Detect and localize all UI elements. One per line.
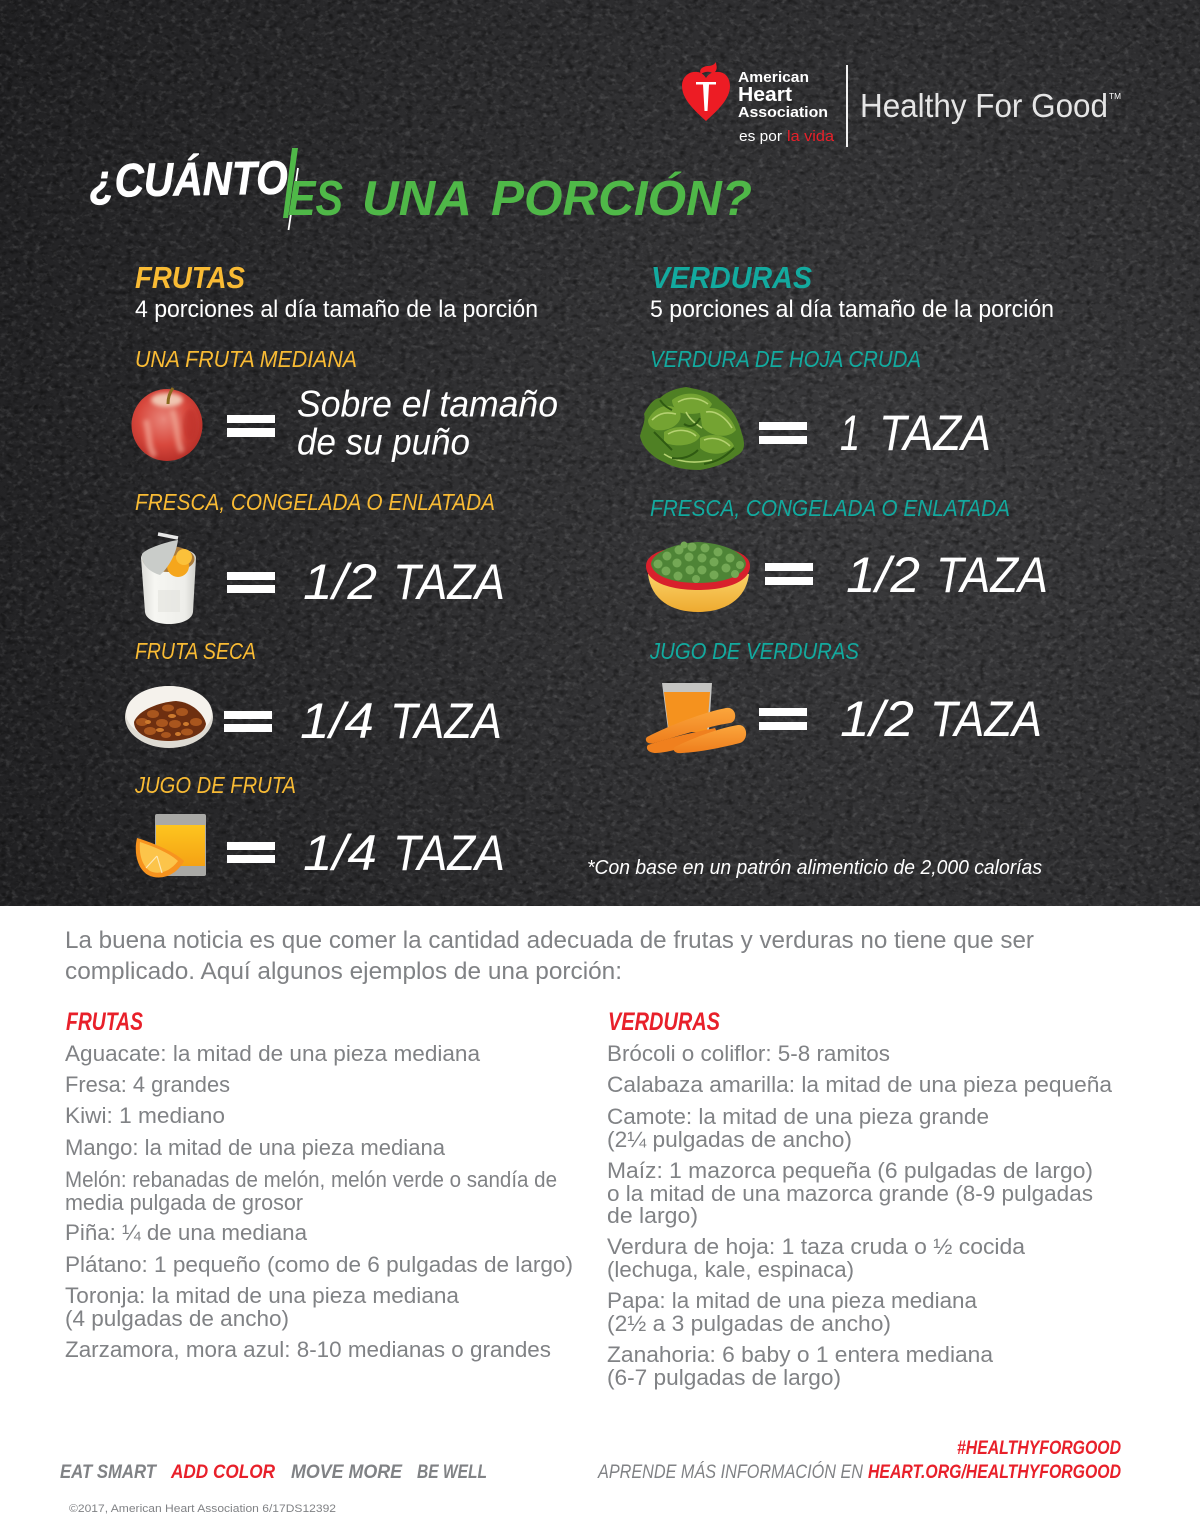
- label: verdura de hoja cruda: VERDURA DE HOJA CRUDA: [650, 346, 921, 372]
- list: frutas: [65, 1008, 573, 1362]
- logo: American Heart Association: la vida: [787, 129, 835, 145]
- amount: 1 taza: TAZA: [879, 405, 991, 461]
- logo: American Heart Association: American: [738, 69, 809, 86]
- list items: verduras: de largo): [607, 1203, 698, 1228]
- list items: frutas: [65, 1041, 573, 1362]
- footer: slogans: [60, 1462, 487, 1483]
- icon: can of fruit: [141, 534, 196, 624]
- list items: frutas: Fresa: 4 grandes: [65, 1072, 230, 1097]
- amount: 1/2 taza: TAZA: [393, 554, 505, 610]
- label: fruta seca: FRUTA SECA: [135, 638, 256, 664]
- equals sign: [227, 415, 275, 437]
- heading: frutas: FRUTAS: [135, 260, 245, 295]
- list items: frutas: Kiwi: 1 mediano: [65, 1103, 225, 1128]
- list items: verduras: Verdura de hoja: 1 taza cruda o ½ cocida: [607, 1234, 1025, 1259]
- title: ¿Cuánto es una porción?: PORCIÓN?: [491, 172, 752, 226]
- amount: 1 taza: 1: [840, 405, 860, 461]
- label: fresca, congelada o enlatada: FRESCA, CONGELADA O ENLATADA: [650, 495, 1010, 521]
- logo: Healthy For Good: TM: [1109, 92, 1121, 101]
- amount: 1/2 taza: 1/2: [846, 547, 920, 603]
- amount: 1/2 taza: TAZA: [936, 547, 1048, 603]
- amount: 1/4 taza: TAZA: [390, 693, 502, 749]
- amount: 1/2 taza: TAZA: [930, 691, 1042, 747]
- copyright: ©2017, American Heart Association 6/17DS12392: [69, 1503, 336, 1515]
- list items: frutas: (4 pulgadas de ancho): [65, 1306, 289, 1331]
- logo: American Heart Association: [682, 62, 835, 145]
- footer: hashtag and web link: APRENDE MÁS INFORMACIÓN EN: [597, 1461, 863, 1483]
- icon: carrots and carrot juice: [646, 683, 746, 753]
- title: ¿Cuánto es una porción?: UNA: [362, 172, 472, 226]
- amount: 1/2 taza: [840, 691, 1042, 747]
- footer: slogans: BE WELL: [417, 1462, 487, 1483]
- equals sign: [227, 572, 275, 593]
- list items: verduras: Zanahoria: 6 baby o 1 entera mediana: [607, 1342, 993, 1367]
- amount: 1/4 taza: TAZA: [393, 825, 505, 881]
- label: jugo de fruta: JUGO DE FRUTA: [134, 772, 296, 798]
- logo: American Heart Association: Association: [738, 104, 828, 121]
- list items: frutas: Toronja: la mitad de una pieza mediana: [65, 1283, 459, 1308]
- footer: slogans: MOVE MORE: [291, 1462, 403, 1483]
- title: ¿Cuánto es una porción?: [89, 148, 752, 230]
- icon: bowl of peas: [646, 542, 750, 612]
- list items: verduras: (lechuga, kale, espinaca): [607, 1257, 854, 1282]
- footer: hashtag and web link: [597, 1438, 1121, 1483]
- intro paragraph: [65, 927, 1034, 985]
- amount: 1/2 taza: [303, 554, 505, 610]
- panel: dark textured hero background: [0, 0, 1200, 906]
- list items: verduras: (6-7 pulgadas de largo): [607, 1365, 841, 1390]
- list items: verduras: Calabaza amarilla: la mitad de una pieza pequeña: [607, 1072, 1112, 1097]
- list items: verduras: (2½ a 3 pulgadas de ancho): [607, 1311, 891, 1336]
- list items: verduras: Camote: la mitad de una pieza grande: [607, 1104, 989, 1129]
- label: fresca, congelada o enlatada: FRESCA, CONGELADA O ENLATADA: [135, 489, 495, 515]
- logo: American Heart Association: es por: [739, 129, 782, 145]
- label: jugo de verduras: JUGO DE VERDURAS: [649, 638, 860, 664]
- amount: 1/4 taza: [300, 693, 502, 749]
- logo: Healthy For Good: Healthy For Good: [860, 87, 1108, 124]
- title: ¿Cuánto es una porción?: ES: [288, 172, 343, 226]
- amount: 1/4 taza: 1/4: [300, 693, 374, 749]
- amount: 1/2 taza: 1/2: [840, 691, 914, 747]
- logo: American Heart Association: Heart: [738, 84, 792, 106]
- list items: verduras: o la mitad de una mazorca grande (8-9 pulgadas: [607, 1181, 1093, 1206]
- list heading: frutas: FRUTAS: [66, 1008, 143, 1036]
- list items: frutas: Aguacate: la mitad de una pieza mediana: [65, 1041, 480, 1066]
- amount: 1/4 taza: 1/4: [303, 825, 377, 881]
- amount: 1/4 taza: [303, 825, 505, 881]
- equals sign: [224, 711, 272, 732]
- list items: frutas: media pulgada de grosor: [65, 1190, 303, 1215]
- text: sobre el tamaño de su puño: de su puño: [297, 422, 470, 462]
- equals sign: [759, 422, 807, 444]
- icon: orange juice and orange slice: [136, 814, 206, 877]
- amount: 1/2 taza: 1/2: [303, 554, 377, 610]
- footer: slogans: EAT SMART: [60, 1462, 157, 1483]
- icon: lettuce: [640, 387, 744, 470]
- heading: verduras: [650, 260, 1054, 323]
- text: sobre el tamaño de su puño: Sobre el tamaño: [297, 384, 558, 424]
- amount: 1 taza: [840, 405, 991, 461]
- list items: frutas: Melón: rebanadas de melón, melón verde o sandía de: [65, 1167, 557, 1192]
- heading: frutas: 4 porciones al día tamaño de la porción: [135, 296, 538, 323]
- list items: verduras: (2¼ pulgadas de ancho): [607, 1127, 852, 1152]
- list items: verduras: Maíz: 1 mazorca pequeña (6 pulgadas de largo): [607, 1158, 1093, 1183]
- icon: heart and torch: [682, 62, 730, 121]
- list items: frutas: Zarzamora, mora azul: 8-10 medianas o grandes: [65, 1337, 551, 1362]
- equals sign: [765, 563, 813, 585]
- heading: verduras: VERDURAS: [651, 260, 812, 295]
- list items: frutas: Piña: ¼ de una mediana: [65, 1220, 307, 1245]
- text: sobre el tamaño de su puño: [297, 384, 558, 462]
- list items: verduras: Brócoli o coliflor: 5-8 ramitos: [607, 1041, 890, 1066]
- heading: verduras: 5 porciones al día tamaño de la porción: [650, 296, 1054, 323]
- intro paragraph: complicado. Aquí algunos ejemplos de una porción:: [65, 958, 622, 985]
- footer: slogans: ADD COLOR: [170, 1462, 275, 1483]
- panel: white information section: [0, 906, 1200, 1517]
- title: ¿Cuánto es una porción?: ¿CUÁNTO: [89, 151, 288, 207]
- icon: bowl of dried fruit: [125, 686, 213, 748]
- amount: 1/2 taza: [846, 547, 1048, 603]
- list: verduras: [607, 1008, 1112, 1390]
- heading: frutas: [135, 260, 538, 323]
- logo divider: [846, 65, 848, 147]
- list items: frutas: Mango: la mitad de una pieza mediana: [65, 1135, 445, 1160]
- list items: verduras: Papa: la mitad de una pieza mediana: [607, 1288, 977, 1313]
- equals sign: [759, 708, 807, 730]
- intro paragraph: La buena noticia es que comer la cantidad adecuada de frutas y verduras no tiene que ser: [65, 927, 1034, 954]
- equals sign: [227, 842, 275, 863]
- list heading: verduras: VERDURAS: [608, 1008, 720, 1036]
- footnote: *Con base en un patrón alimenticio de 2,000 calorías: [587, 857, 1042, 879]
- label: una fruta mediana: UNA FRUTA MEDIANA: [135, 346, 357, 372]
- footer: hashtag and web link: #HEALTHYFORGOOD: [957, 1438, 1121, 1459]
- list items: verduras: [607, 1041, 1112, 1390]
- list items: frutas: Plátano: 1 pequeño (como de 6 pulgadas de largo): [65, 1252, 573, 1277]
- icon: apple: [132, 388, 202, 461]
- footer: hashtag and web link: HEART.ORG/HEALTHYFORGOOD: [868, 1462, 1121, 1483]
